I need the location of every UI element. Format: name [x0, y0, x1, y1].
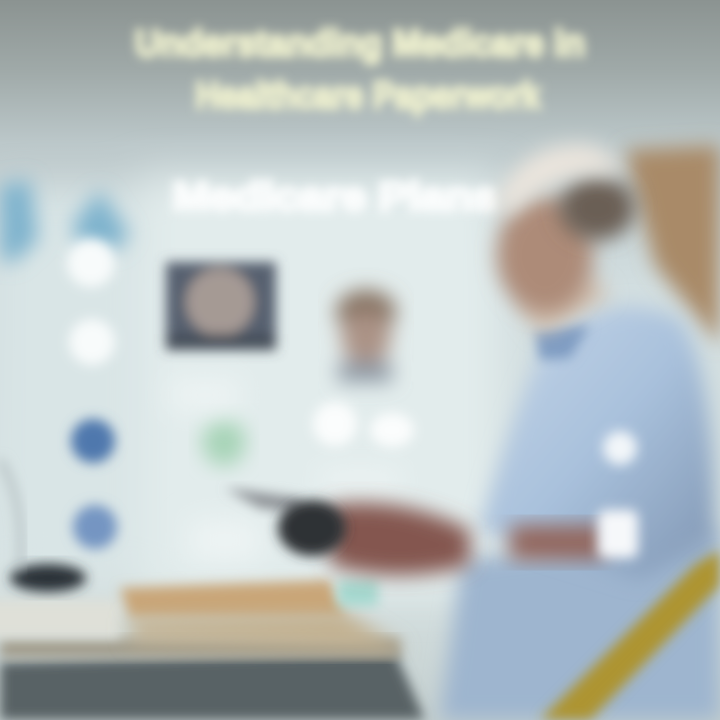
- white caption under person: [313, 402, 414, 447]
- icon: blue circle three: [71, 419, 115, 463]
- faint text lines: [170, 380, 400, 560]
- poster photo: group portrait: [166, 262, 276, 350]
- man: white hair: [495, 145, 621, 215]
- desk body: [0, 652, 425, 720]
- man: face: [497, 197, 593, 313]
- green check icon: [202, 418, 246, 466]
- man: forearm near hand: [330, 503, 470, 575]
- desk paper: [0, 600, 120, 638]
- man: [225, 145, 720, 720]
- white button on sleeve: [603, 431, 637, 465]
- man: forearm near elbow: [510, 525, 605, 560]
- white cuff: [598, 510, 638, 558]
- light poster panel: [0, 175, 500, 595]
- desk: [0, 460, 425, 720]
- title: Healthcare Paperwork: [196, 75, 541, 117]
- desk edge band: [0, 638, 400, 658]
- poster photo: person portrait: [336, 290, 396, 382]
- man: collar: [535, 325, 590, 360]
- dark tablet in hand: [278, 500, 346, 556]
- icon: white circle one: [67, 239, 115, 287]
- title: Understanding Medicare in: [135, 23, 585, 65]
- icon: blue circle four: [73, 505, 117, 549]
- man: shirt: [480, 307, 715, 580]
- dark object on desk: [10, 564, 86, 592]
- blue decorative marks at left: [0, 180, 130, 265]
- desk wooden front: [130, 612, 405, 650]
- man: neck: [515, 275, 610, 335]
- desk wooden top: [120, 580, 345, 618]
- cable: [0, 460, 21, 570]
- brown wall area at right: [625, 145, 720, 345]
- icon column: [67, 239, 117, 549]
- title: [135, 23, 585, 117]
- man: dark hair side: [559, 176, 635, 240]
- poster subheading: Medicare Plans: [172, 175, 497, 219]
- teal note: [338, 580, 378, 606]
- yellow strap: [540, 550, 720, 720]
- man: trousers and lower shirt: [440, 530, 720, 720]
- grey tablet edge: [225, 488, 300, 512]
- icon: white circle two: [69, 319, 115, 365]
